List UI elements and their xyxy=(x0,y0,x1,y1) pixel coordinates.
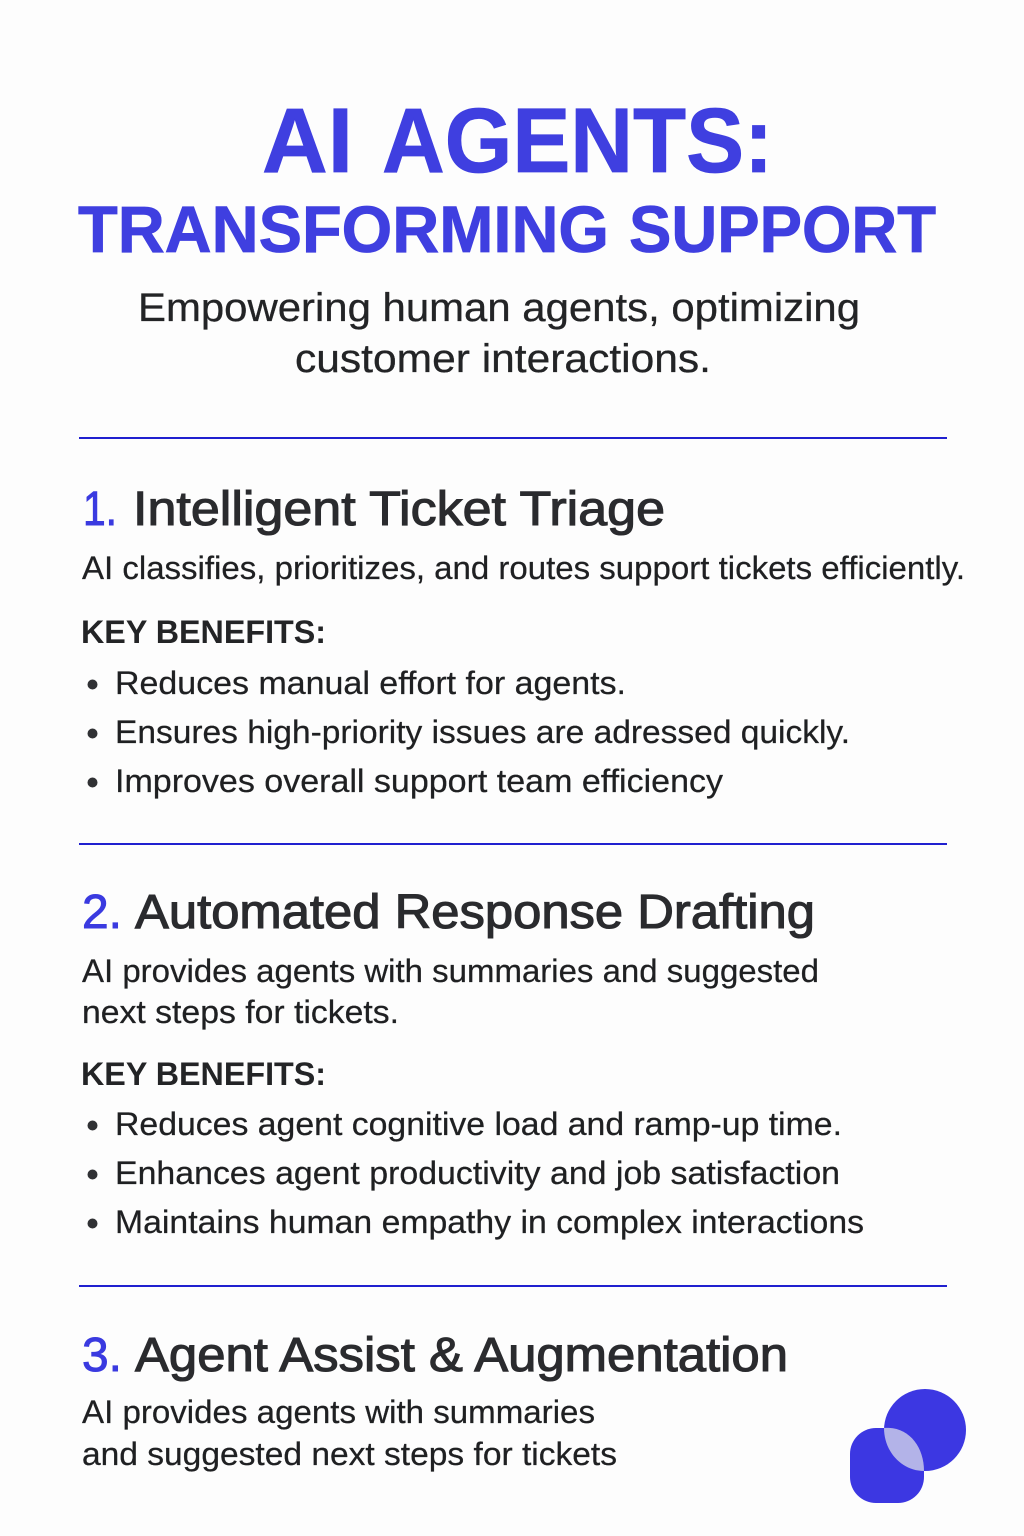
heading: agent assist and augmentation: Agent Assist & Augmentation xyxy=(135,1329,788,1382)
key benefits label: KEY BENEFITS: xyxy=(81,1056,326,1092)
description xyxy=(82,1394,617,1472)
description: next steps for tickets. xyxy=(82,994,399,1030)
benefits list: Enhances agent productivity and job satisfaction xyxy=(115,1155,840,1191)
icon: overlapping circle and rounded square logo xyxy=(850,1389,966,1503)
benefits list: Improves overall support team efficiency xyxy=(115,763,724,799)
subtitle: customer interactions. xyxy=(295,337,711,381)
heading: automated response drafting: 2. xyxy=(82,886,122,939)
description xyxy=(82,953,819,1030)
title: TRANSFORMING xyxy=(78,192,609,266)
subtitle xyxy=(138,286,860,381)
title xyxy=(78,90,936,266)
description: AI classifies, prioritizes, and routes support tickets efficiently. xyxy=(82,550,965,586)
panel: section 2 xyxy=(81,886,864,1240)
benefits list: Reduces agent cognitive load and ramp-up time. xyxy=(115,1106,842,1142)
description: AI provides agents with summaries and suggested xyxy=(82,953,819,989)
panel: section 3 xyxy=(82,1329,788,1472)
panel: section 1 xyxy=(81,483,965,799)
subtitle: Empowering human agents, optimizing xyxy=(138,286,860,330)
heading: intelligent ticket triage: 1. xyxy=(83,483,117,536)
heading: automated response drafting: Automated Response Drafting xyxy=(135,886,815,939)
benefits list: Maintains human empathy in complex interactions xyxy=(115,1204,864,1240)
title: SUPPORT xyxy=(629,192,936,266)
title: AGENTS: xyxy=(382,90,773,192)
heading: agent assist and augmentation: 3. xyxy=(82,1329,122,1382)
benefits list xyxy=(88,1106,864,1240)
key benefits label: KEY BENEFITS: xyxy=(81,614,326,650)
heading: intelligent ticket triage: Intelligent Ticket Triage xyxy=(133,483,665,536)
description: AI provides agents with summaries xyxy=(82,1394,595,1430)
title: AI xyxy=(262,90,353,192)
benefits list xyxy=(88,665,850,799)
benefits list: Ensures high-priority issues are adressed quickly. xyxy=(115,714,850,750)
description: and suggested next steps for tickets xyxy=(82,1436,617,1472)
benefits list: Reduces manual effort for agents. xyxy=(115,665,626,701)
